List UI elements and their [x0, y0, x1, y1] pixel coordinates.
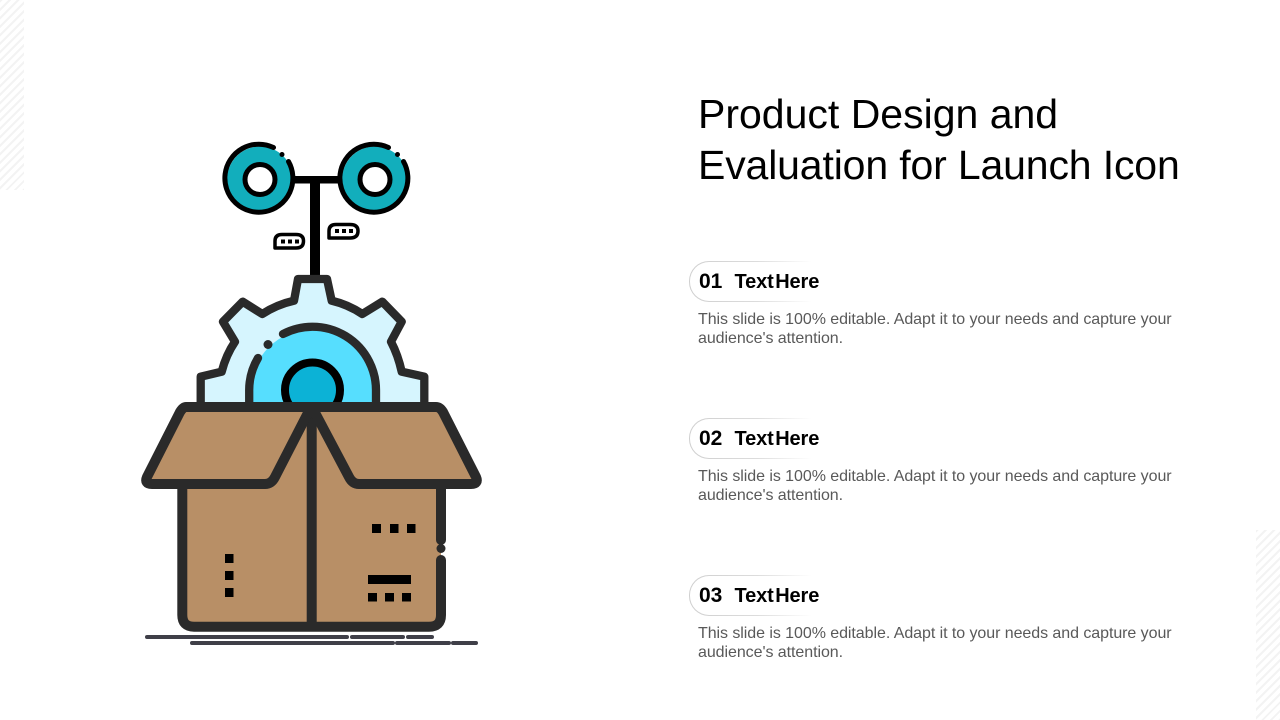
box left flap [146, 407, 311, 484]
icon: right speech bubble [329, 224, 358, 238]
illustration: product box with gear icon [141, 142, 482, 645]
item 02: audience's attention. [698, 487, 843, 504]
box markings [225, 524, 416, 602]
title: Product Design and [698, 91, 1058, 137]
ground lines [147, 637, 476, 643]
icon: gear [196, 274, 428, 402]
item 03: 03 [699, 584, 722, 607]
item 01: Text Here [734, 271, 819, 293]
icon: right wheel [340, 144, 408, 212]
item 02: This slide is 100% editable. Adapt it to your needs and capture your [698, 468, 1172, 485]
item 01: audience's attention. [698, 330, 843, 347]
item 01 [689, 261, 1172, 347]
icon: T-shaped stem [295, 176, 340, 278]
box right flap [312, 407, 477, 484]
item 02: 02 [699, 427, 722, 450]
item 03: Text Here [734, 585, 819, 607]
item 03: This slide is 100% editable. Adapt it to your needs and capture your [698, 625, 1172, 642]
icon: left wheel [225, 144, 293, 212]
icon: left speech bubble [275, 234, 304, 248]
item 01: This slide is 100% editable. Adapt it to your needs and capture your [698, 311, 1172, 328]
item 01: 01 [699, 270, 722, 293]
title: Evaluation for Launch Icon [698, 142, 1180, 188]
title [698, 91, 1180, 188]
item 03: audience's attention. [698, 644, 843, 661]
item 02 [689, 418, 1172, 504]
icon: cardboard box [146, 407, 477, 627]
item 02: Text Here [734, 428, 819, 450]
item 03 [689, 575, 1172, 661]
